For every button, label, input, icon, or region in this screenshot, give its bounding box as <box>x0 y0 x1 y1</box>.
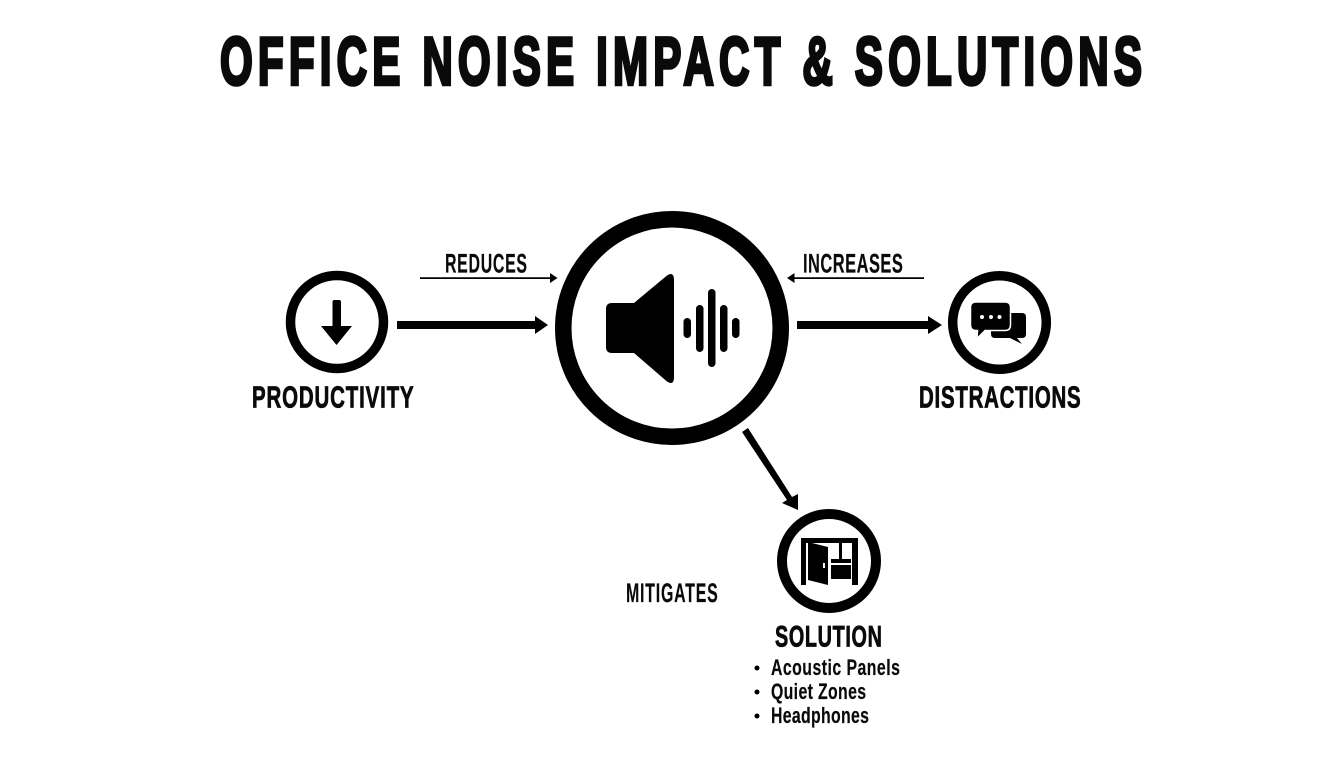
solution list: Acoustic Panels <box>771 657 900 681</box>
mitigates label: MITIGATES <box>626 578 718 608</box>
productivity circle <box>290 276 384 368</box>
distractions label: DISTRACTIONS <box>919 379 1081 415</box>
central circle ring <box>563 219 781 437</box>
thick arrow: productivity to noise <box>397 316 548 334</box>
solution list <box>754 657 900 729</box>
solution heading: SOLUTION <box>775 621 882 654</box>
icon: chat bubbles <box>970 302 1026 344</box>
central noise node <box>563 219 781 437</box>
distractions circle <box>953 276 1046 369</box>
icon: speaker with sound wave <box>606 274 740 383</box>
solution circle <box>782 514 876 608</box>
diagonal arrow: noise to solution <box>742 428 798 510</box>
distractions node <box>919 276 1081 415</box>
solution list: Quiet Zones <box>771 681 866 705</box>
productivity label: PRODUCTIVITY <box>252 379 414 415</box>
solution list: Headphones <box>771 705 869 729</box>
solution node <box>754 514 900 729</box>
title: OFFICE NOISE IMPACT & SOLUTIONS <box>220 23 1142 99</box>
productivity node <box>252 276 414 415</box>
thin arrow: reduces <box>420 273 558 283</box>
increases label: INCREASES <box>803 248 903 278</box>
icon: door and panels <box>801 538 858 585</box>
reduces label: REDUCES <box>445 248 527 278</box>
icon: down arrow <box>321 300 352 345</box>
thin arrow: increases <box>787 273 924 283</box>
thick arrow: noise to distractions <box>797 316 942 334</box>
